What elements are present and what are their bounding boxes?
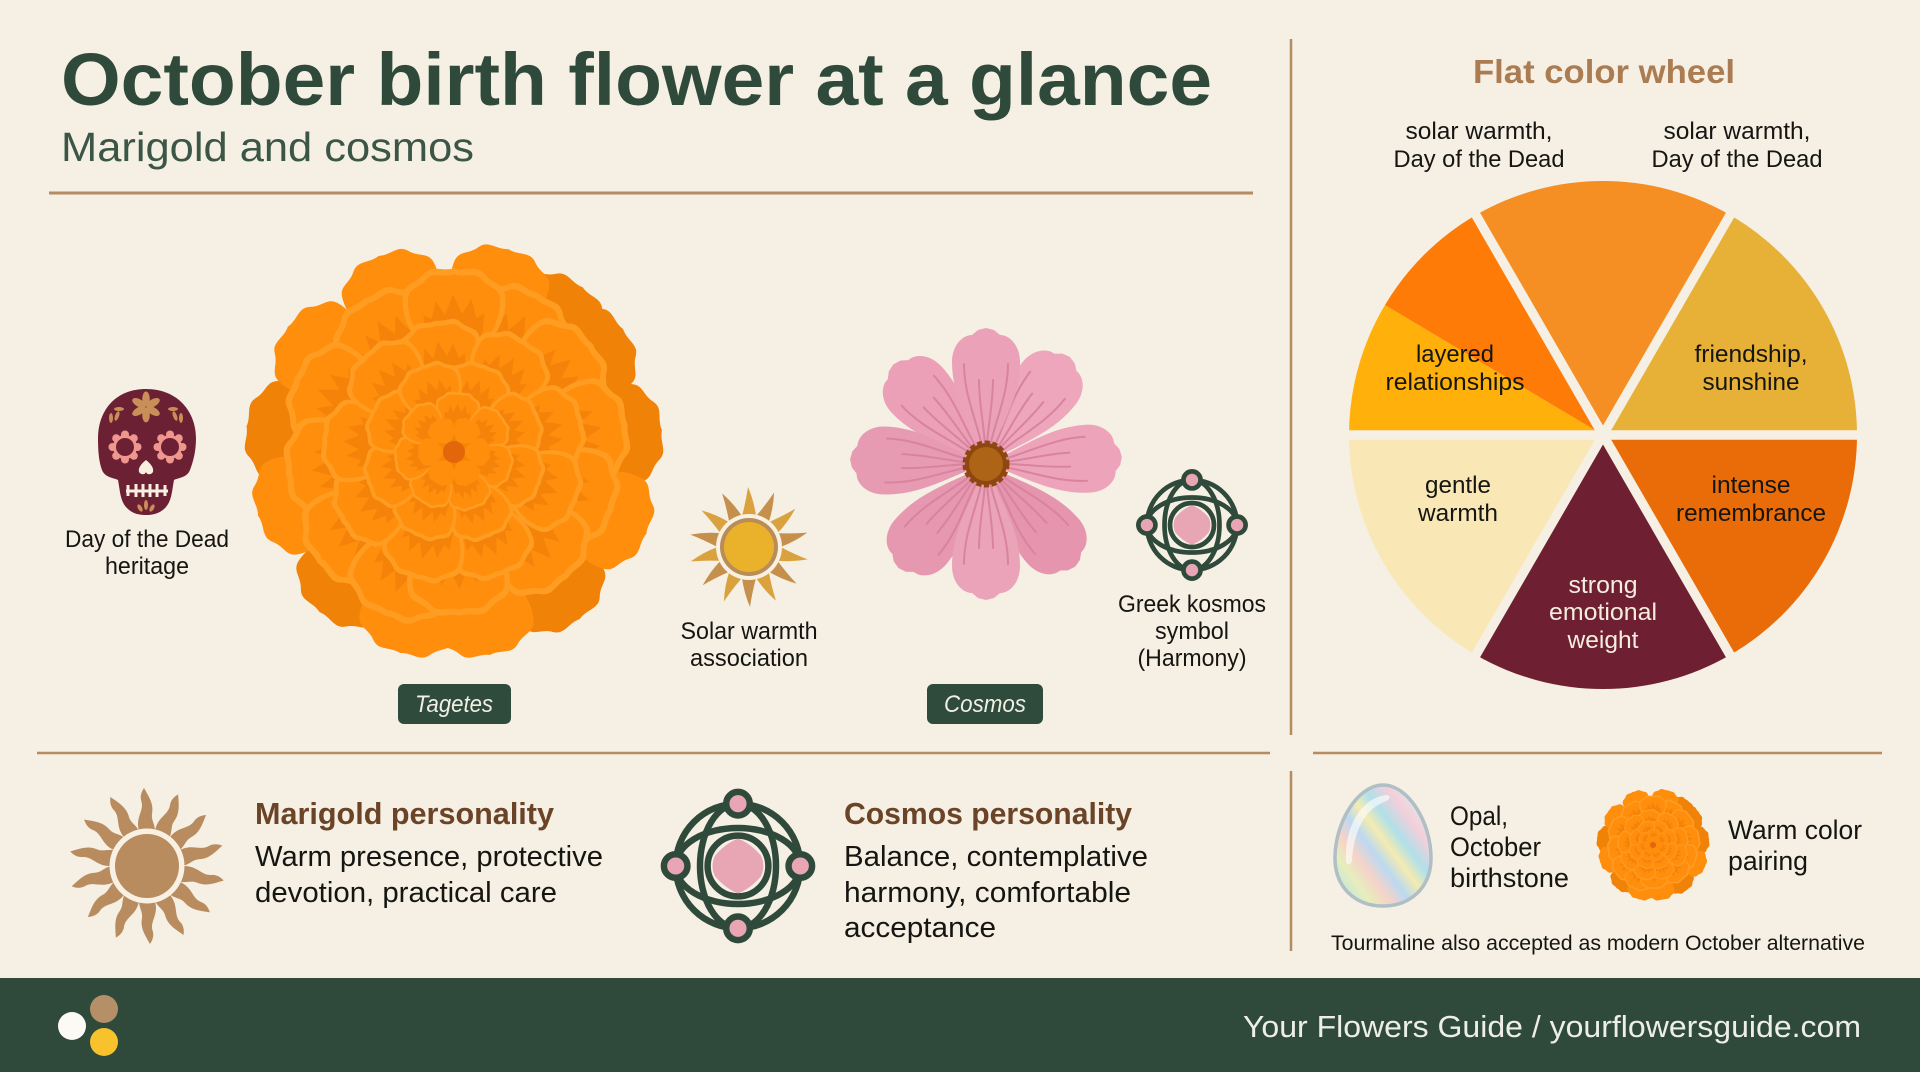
- wedge: solar orange: [1476, 181, 1730, 435]
- panel: marigold personality: [69, 788, 603, 944]
- wheel label: intense remembrance: remembrance: [1676, 500, 1826, 527]
- title: October birth flower at a glance: [61, 38, 1212, 121]
- text: cosmos description: [844, 841, 1148, 944]
- subtitle: Marigold and cosmos: [61, 124, 474, 170]
- wheel label: strong emotional weight: weight: [1566, 627, 1639, 654]
- label: Day of the Dead heritage: heritage: [105, 553, 189, 580]
- wedge: strong maroon: [1476, 435, 1730, 689]
- text: warm color pairing: [1728, 815, 1862, 876]
- label: top-right wedge caption: Day of the Dead: [1652, 146, 1822, 173]
- tag: Tagetes: Tagetes: [415, 691, 493, 718]
- wheel label: gentle warmth: warmth: [1417, 500, 1498, 527]
- label: top-left wedge caption: solar warmth,: [1406, 118, 1552, 145]
- illustration: cosmos flower: [849, 328, 1124, 600]
- label: top-left wedge caption: Day of the Dead: [1394, 146, 1564, 173]
- footer text: Your Flowers Guide / yourflowersguide.com: [1243, 1009, 1861, 1044]
- wedge: friendship yellow: [1603, 215, 1857, 435]
- icon: wavy sun: [69, 788, 225, 944]
- label: Day of the Dead heritage: [65, 526, 229, 580]
- icon: kosmos symbol large: [664, 792, 812, 940]
- label: top-right wedge caption: [1652, 118, 1822, 173]
- label: Solar warmth association: Solar warmth: [680, 618, 818, 645]
- wedge: layered gold: [1349, 305, 1603, 435]
- wheel label: strong emotional weight: emotional: [1549, 599, 1657, 626]
- wheel label: intense remembrance: [1676, 472, 1826, 527]
- label: Day of the Dead heritage: Day of the Dead: [65, 526, 229, 553]
- panel: cosmos personality: [664, 792, 1148, 944]
- text: opal October birthstone: [1450, 801, 1569, 893]
- illustration: marigold flower: [240, 236, 667, 666]
- text: marigold description: devotion, practical care: [255, 877, 557, 909]
- text: cosmos description: harmony, comfortable: [844, 877, 1131, 909]
- label: Greek kosmos symbol (Harmony): (Harmony): [1138, 645, 1246, 672]
- panel: flowers and symbols: [65, 236, 1266, 724]
- wheel label: layered relationships: [1386, 341, 1524, 396]
- wheel label: layered relationships: layered: [1416, 341, 1494, 368]
- label: Solar warmth association: association: [690, 645, 808, 672]
- text: cosmos description: acceptance: [844, 912, 996, 944]
- text: opal October birthstone: birthstone: [1450, 863, 1569, 893]
- wheel label: friendship, sunshine: sunshine: [1702, 369, 1800, 396]
- wheel label: gentle warmth: [1417, 472, 1498, 527]
- wheel label: friendship, sunshine: [1694, 341, 1808, 396]
- label: Greek kosmos symbol (Harmony): Greek kosmos: [1118, 591, 1266, 618]
- label: Greek kosmos symbol (Harmony): [1118, 591, 1266, 672]
- text: marigold description: Warm presence, protective: [255, 841, 603, 873]
- chart: color wheel: [1343, 181, 1863, 689]
- icon: small marigold: [1595, 787, 1711, 903]
- label: top-right wedge caption: solar warmth,: [1664, 118, 1810, 145]
- wheel label: friendship, sunshine: friendship,: [1694, 341, 1808, 368]
- heading: Marigold personality: Marigold personality: [255, 796, 555, 831]
- label: Greek kosmos symbol (Harmony): symbol: [1155, 618, 1229, 645]
- tag: Tagetes: [398, 684, 511, 724]
- panel: flat color wheel: [1343, 53, 1863, 689]
- text: opal October birthstone: Opal,: [1450, 801, 1508, 831]
- icon: Greek kosmos symbol: [1138, 471, 1246, 579]
- note: tourmaline: Tourmaline also accepted as modern October alternative: [1331, 932, 1865, 955]
- wheel label: intense remembrance: intense: [1712, 472, 1790, 499]
- text: warm color pairing: pairing: [1728, 846, 1808, 876]
- icon: solar warmth sun: [689, 487, 809, 607]
- footer logo dots: [58, 995, 118, 1056]
- wheel label: strong emotional weight: [1549, 572, 1657, 654]
- icon: sugar skull: [98, 389, 196, 515]
- wheel label: layered relationships: relationships: [1386, 369, 1524, 396]
- heading: Cosmos personality: Cosmos personality: [844, 796, 1133, 831]
- text: cosmos description: Balance, contemplative: [844, 841, 1148, 873]
- icon: opal gemstone: [1335, 785, 1431, 906]
- label: Solar warmth association: [680, 618, 818, 672]
- text: marigold description: [255, 841, 603, 909]
- tag: Cosmos: [927, 684, 1043, 724]
- panel: birthstone and pairing: [1331, 785, 1865, 955]
- wedge: intense orange: [1603, 435, 1857, 655]
- tag: Cosmos: Cosmos: [944, 691, 1026, 718]
- text: warm color pairing: Warm color: [1728, 815, 1862, 845]
- label: top-left wedge caption: [1394, 118, 1564, 173]
- wedge: layered orange: [1385, 215, 1603, 435]
- text: opal October birthstone: October: [1450, 832, 1541, 862]
- wedge: gentle cream: [1349, 435, 1603, 655]
- wheel label: gentle warmth: gentle: [1425, 472, 1491, 499]
- footer bar: [0, 978, 1920, 1072]
- wheel label: strong emotional weight: strong: [1568, 572, 1638, 599]
- heading: Flat color wheel: Flat color wheel: [1473, 53, 1735, 90]
